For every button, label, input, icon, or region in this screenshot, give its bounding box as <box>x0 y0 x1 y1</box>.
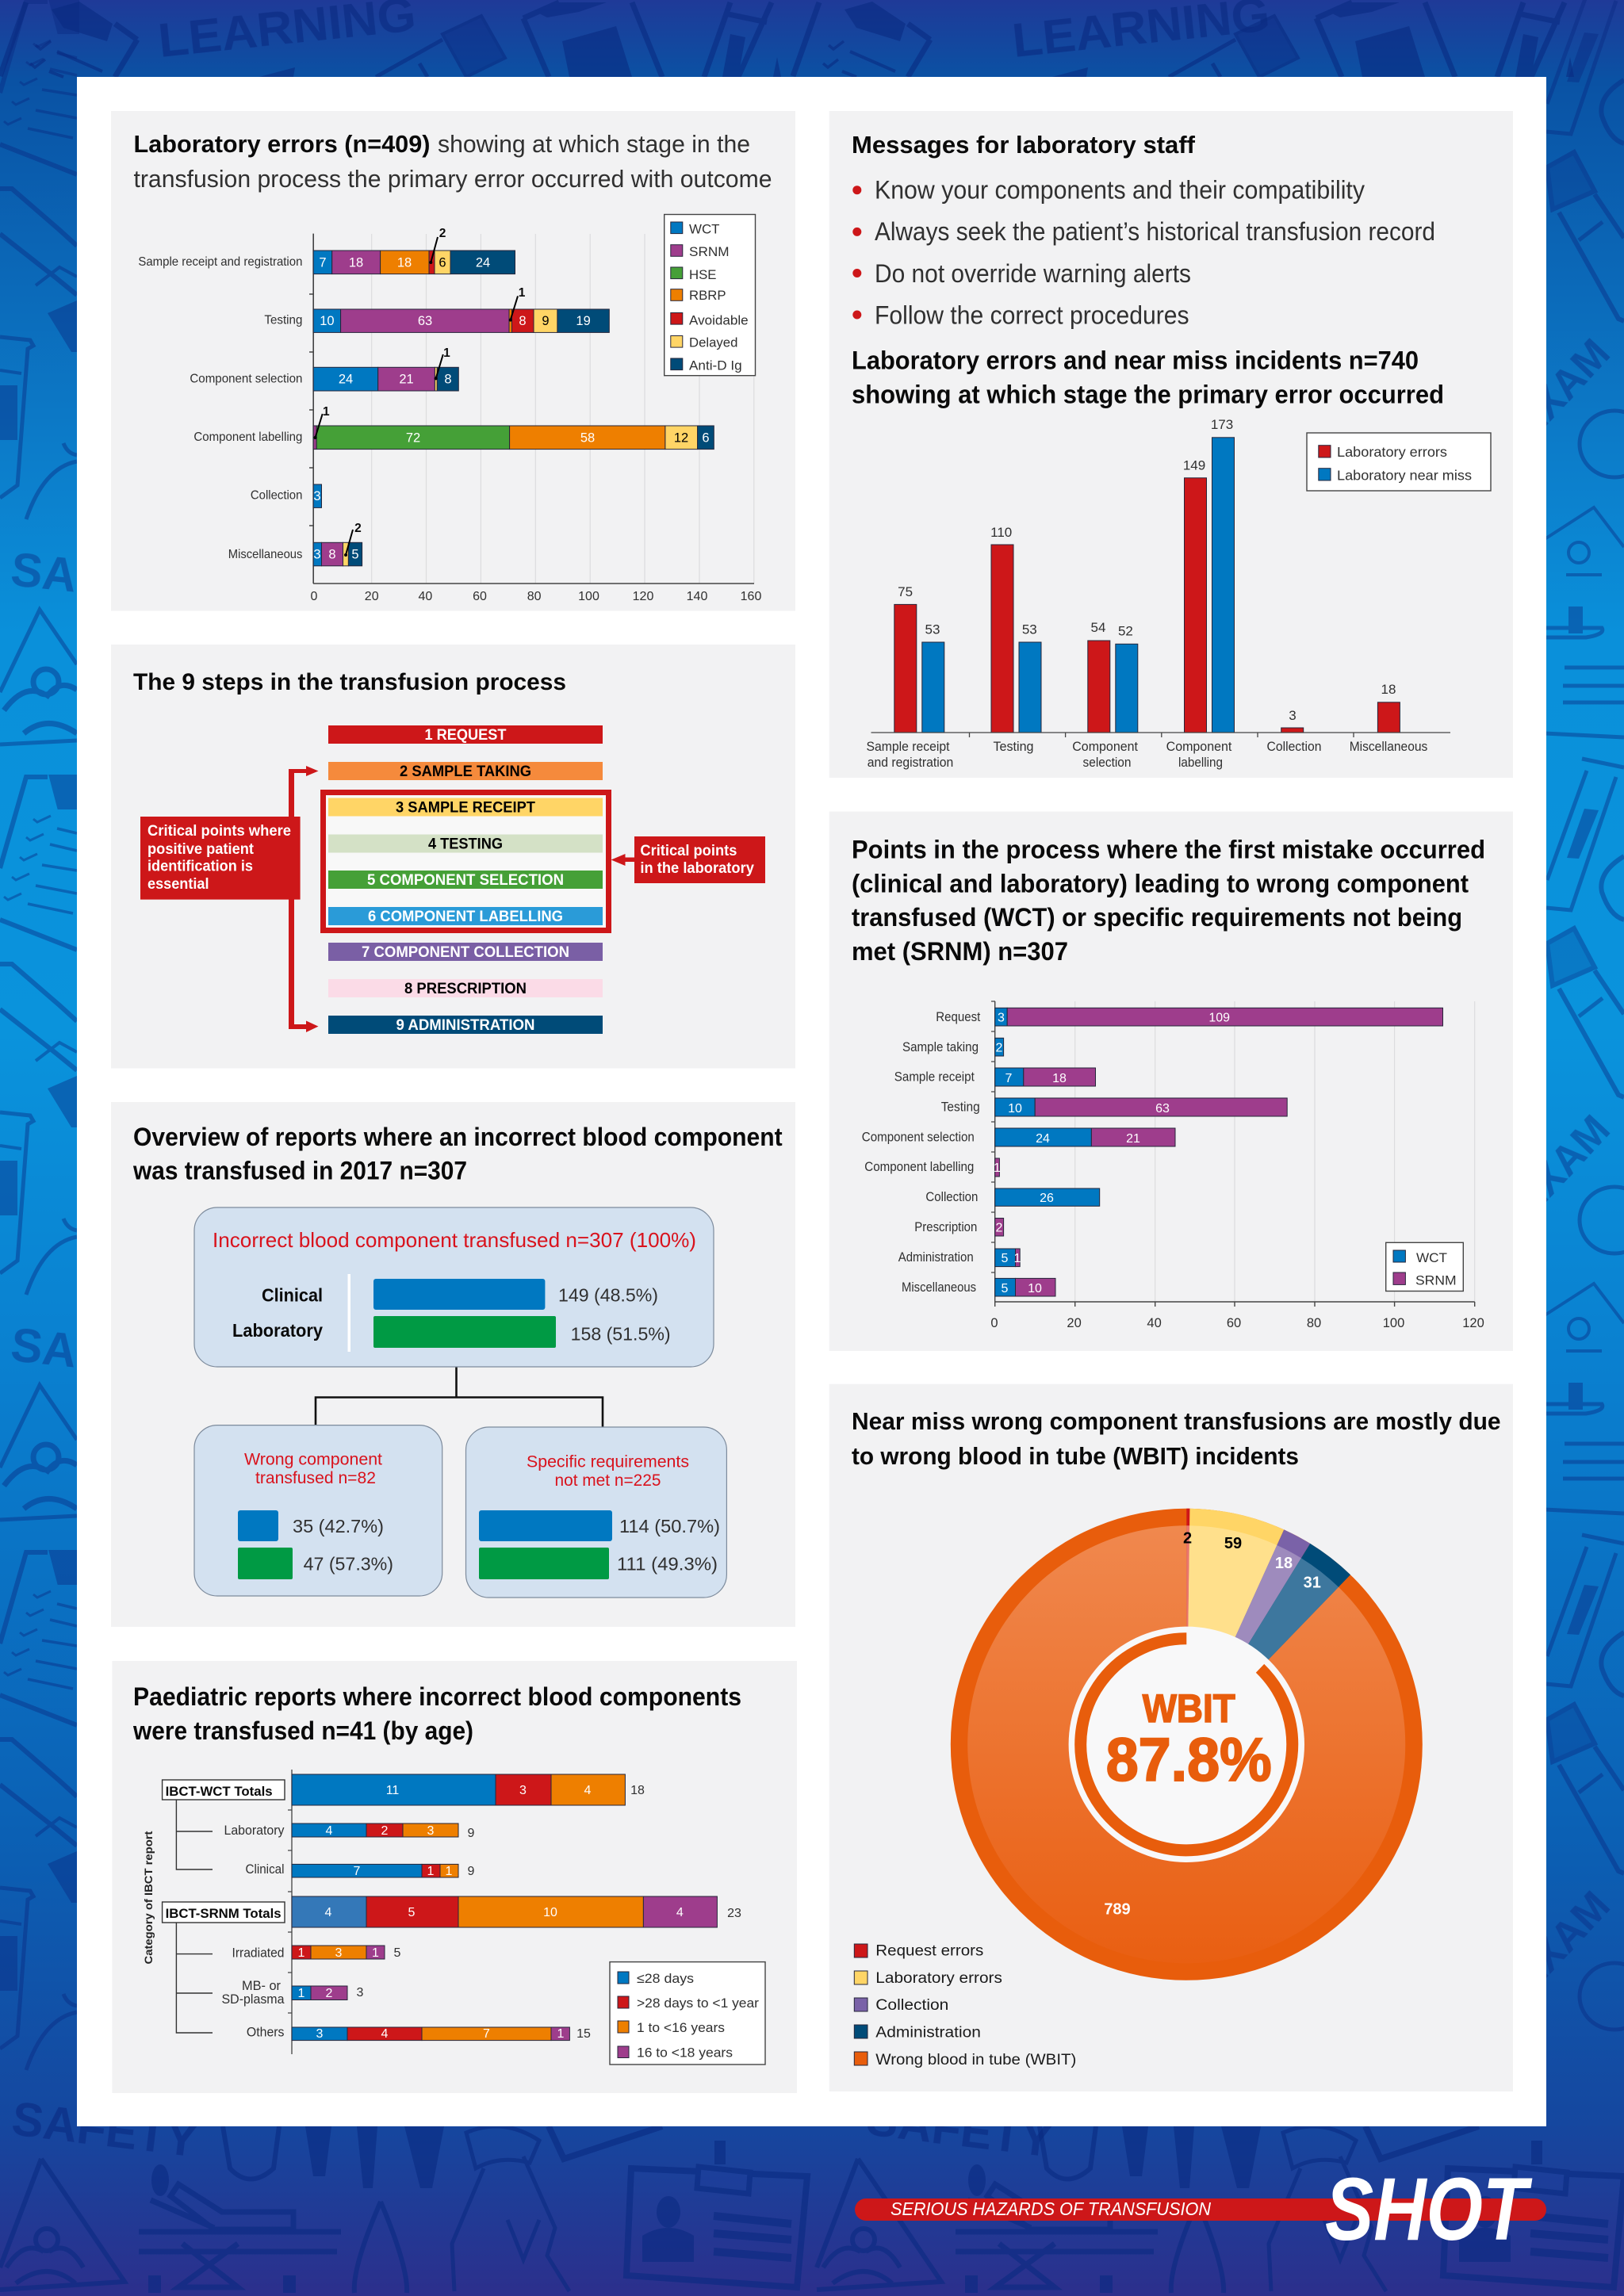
axis tick labels: 0 <box>311 590 318 603</box>
title: overview: was transfused in 2017 n=307 <box>132 1156 467 1184</box>
category labels: Component <box>1072 739 1138 754</box>
background: blue gradient with icon pattern: EXAM <box>1504 1883 1619 2001</box>
title: laboratory errors: showing at which stage in the <box>438 130 750 158</box>
bar value labels: 7 <box>319 255 327 270</box>
bar value labels: 149 <box>1183 457 1205 473</box>
donut chart: 789 <box>1104 1901 1131 1919</box>
bar value labels: 24 <box>339 373 353 387</box>
legend <box>665 214 755 376</box>
leader annotations: 2 <box>439 227 446 240</box>
axis tick labels: 120 <box>1462 1316 1484 1330</box>
bar value labels: 8 <box>328 547 336 561</box>
step bars: 9 ADMINISTRATION <box>396 1017 534 1034</box>
title: laboratory errors <box>133 130 772 193</box>
axis tick labels <box>990 1316 1484 1330</box>
legend: Request errors <box>875 1943 983 1960</box>
box: wrong component transfused <box>194 1425 442 1596</box>
bar value labels: 2 <box>381 1824 389 1838</box>
bullet list: Follow the correct procedures <box>875 301 1189 330</box>
bar value labels: 4 <box>325 1906 332 1919</box>
donut chart <box>951 1509 1423 1980</box>
bar value labels: 53 <box>925 622 940 637</box>
box: wrong component transfused: Wrong component <box>244 1451 382 1468</box>
box: specific requirements not met <box>466 1427 726 1598</box>
category labels: Miscellaneous <box>1350 739 1427 754</box>
row totals: 3 <box>357 1986 364 1999</box>
bar value labels: 3 <box>335 1946 343 1960</box>
bar value labels: 8 <box>444 373 452 387</box>
leader annotations: 1 <box>443 346 450 360</box>
stacked bars <box>313 251 714 566</box>
bar value labels: 10 <box>320 314 335 328</box>
bar value labels: 26 <box>1040 1192 1054 1205</box>
heading: near miss <box>852 346 1444 409</box>
category labels: MB- or <box>242 1979 282 1993</box>
bar value labels: 24 <box>476 255 490 270</box>
row totals: 9 <box>468 1865 475 1878</box>
bar value labels: 53 <box>1022 622 1037 637</box>
category labels: Others <box>247 2026 284 2040</box>
legend: Anti-D Ig <box>689 358 742 373</box>
legend: SRNM <box>689 244 730 259</box>
callout: positive patient identification <box>140 817 301 900</box>
chart grid and axes <box>309 234 754 584</box>
bar value labels: 3 <box>998 1012 1005 1024</box>
bar value labels: 12 <box>674 431 688 446</box>
bar value labels: 63 <box>418 314 432 328</box>
category labels <box>222 1823 285 2040</box>
legend: ≤28 days <box>637 1971 694 1986</box>
bar value labels: 58 <box>580 431 595 446</box>
row labels: Miscellaneous <box>228 548 302 561</box>
bar value labels <box>298 1784 684 2041</box>
top box: incorrect blood component: Incorrect blood component transfused n=307 (100%) <box>213 1228 696 1252</box>
axis tick labels: 0 <box>990 1316 998 1330</box>
axis tick labels: 40 <box>1147 1316 1162 1330</box>
bar value labels: 18 <box>397 255 412 270</box>
row labels: Collection <box>925 1190 978 1204</box>
panel: paediatric reports by age <box>113 1661 797 2093</box>
bar value labels: 63 <box>1155 1102 1170 1115</box>
category labels <box>866 739 1427 770</box>
bar value labels: 2 <box>996 1221 1003 1235</box>
step bars: 4 TESTING <box>428 836 503 853</box>
background: blue gradient with icon pattern: EXAM <box>1504 1107 1619 1225</box>
row totals: 5 <box>394 1946 401 1960</box>
row labels: Testing <box>941 1100 980 1115</box>
footer logo: SHOT Serious Hazards of Transfusion: SHOT <box>1325 2160 1533 2259</box>
bar value labels: 1 <box>994 1161 1001 1175</box>
category labels: Component <box>1166 739 1232 754</box>
bar value labels <box>898 417 1396 723</box>
bar value labels: 18 <box>1381 682 1396 697</box>
stacked bars <box>995 1008 1443 1296</box>
axis tick labels: 40 <box>419 590 432 603</box>
title: laboratory errors: Laboratory errors (n=409) <box>133 130 430 158</box>
row labels: Component selection <box>862 1131 975 1145</box>
bar value labels: 75 <box>898 584 913 599</box>
title: overview: Overview of reports where an incorrect blood component <box>133 1123 783 1151</box>
footer logo: SHOT Serious Hazards of Transfusion: SERIOUS HAZARDS OF TRANSFUSION <box>891 2198 1211 2219</box>
donut chart: 31 <box>1304 1574 1321 1591</box>
legend: 1 to <16 years <box>637 2020 725 2035</box>
top box: incorrect blood component: Clinical <box>262 1284 323 1305</box>
bar value labels: 5 <box>1002 1252 1009 1265</box>
row labels: Administration <box>898 1250 974 1265</box>
step bars: 8 PRESCRIPTION <box>404 981 527 997</box>
legend: SRNM <box>1415 1272 1457 1288</box>
legend: WCT <box>1416 1250 1447 1265</box>
row labels: Sample taking <box>902 1040 979 1054</box>
bar value labels: 7 <box>483 2027 490 2041</box>
category labels: Collection <box>1267 739 1321 754</box>
category labels: Clinical <box>246 1862 284 1877</box>
row totals: 15 <box>576 2027 591 2041</box>
step bars: 2 SAMPLE TAKING <box>400 763 531 780</box>
step bars <box>328 725 603 1034</box>
bar value labels: 3 <box>316 2027 324 2041</box>
panel: overview of incorrect blood component reports <box>111 1102 795 1627</box>
bar value labels: 7 <box>1005 1072 1013 1085</box>
row totals: 23 <box>727 1907 741 1920</box>
category tree lines <box>176 1800 213 2033</box>
bar value labels: 10 <box>1008 1102 1022 1115</box>
heading: 9 steps: The 9 steps in the transfusion process <box>133 669 566 695</box>
row totals: 9 <box>468 1827 475 1840</box>
row labels: Sample receipt <box>894 1070 975 1085</box>
top box: incorrect blood component: 149 (48.5%) <box>558 1284 658 1305</box>
legend: Collection <box>875 1997 948 2014</box>
total box: IBCT-WCT: IBCT-WCT Totals <box>166 1785 273 1799</box>
title: first mistake: (clinical and laboratory) leading to wrong component <box>852 869 1469 897</box>
legend <box>854 1943 1076 2068</box>
legend: Avoidable <box>689 312 749 327</box>
total box: IBCT-WCT <box>163 1780 285 1800</box>
legend: WCT <box>689 222 720 237</box>
axis tick labels: 160 <box>741 590 761 603</box>
bar value labels: 54 <box>1091 620 1105 635</box>
bar value labels: 109 <box>1208 1012 1230 1024</box>
top box: incorrect blood component: 158 (51.5%) <box>571 1324 671 1345</box>
row labels: Component labelling <box>193 430 302 444</box>
bar value labels: 173 <box>1211 417 1233 432</box>
axis tick labels: 100 <box>1383 1316 1404 1330</box>
callout: positive patient identification: essential <box>147 876 209 893</box>
bar value labels: 1 <box>446 1865 453 1878</box>
bar value labels: 10 <box>1028 1282 1042 1295</box>
category labels: Irradiated <box>232 1946 284 1961</box>
title: first mistake <box>852 836 1485 966</box>
arrow: positive identification bracket <box>289 766 319 1032</box>
bar value labels: 4 <box>676 1906 684 1919</box>
donut centre: WBIT 87.8%: 87.8% <box>1106 1726 1272 1794</box>
row totals <box>357 1784 741 2041</box>
legend: Laboratory errors <box>875 1970 1002 1987</box>
heading: near miss: Laboratory errors and near miss incidents n=740 <box>852 346 1419 375</box>
panel: the 9 steps in the transfusion process <box>111 645 795 1069</box>
background: blue gradient with icon pattern: SAFETY <box>9 2091 201 2168</box>
bullet list: Always seek the patient’s historical transfusion record <box>875 217 1435 246</box>
bar value labels: 2 <box>326 1987 333 2000</box>
connector lines <box>316 1367 603 1429</box>
step bars: 3 SAMPLE RECEIPT <box>396 799 535 817</box>
heading: messages for laboratory staff: Messages for laboratory staff <box>852 131 1196 159</box>
bar value labels: 7 <box>354 1865 361 1878</box>
legend: Laboratory near miss <box>1337 468 1472 484</box>
bar value labels: 10 <box>543 1906 557 1919</box>
panel: first mistake points chart <box>829 812 1513 1351</box>
background: blue gradient with icon pattern: SAFETY <box>9 542 199 614</box>
box: wrong component transfused: 47 (57.3%) <box>304 1554 393 1575</box>
box: specific requirements not met: 114 (50.7%) <box>619 1516 720 1536</box>
bar value labels: 3 <box>1289 708 1297 723</box>
axis tick labels: 20 <box>1067 1316 1082 1330</box>
box: wrong component transfused: transfused n=82 <box>255 1469 376 1487</box>
category labels: selection <box>1083 755 1131 770</box>
row labels <box>138 255 302 561</box>
bar value labels: 110 <box>990 525 1012 540</box>
row labels: Component labelling <box>864 1160 974 1174</box>
bar value labels: 21 <box>399 373 414 387</box>
bar value labels: 8 <box>519 314 527 328</box>
background: blue gradient with icon pattern: SAFETY <box>864 2091 1055 2168</box>
legend: Administration <box>875 2024 981 2041</box>
total box: IBCT-SRNM: IBCT-SRNM Totals <box>166 1907 282 1921</box>
bar value labels: 2 <box>996 1042 1003 1054</box>
title: overview <box>132 1123 783 1184</box>
bar value labels <box>313 255 710 561</box>
axis label: category of IBCT report: Category of IBCT report <box>142 1831 155 1965</box>
row labels: Testing <box>264 314 302 327</box>
bar value labels: 4 <box>381 2027 389 2041</box>
bar value labels: 5 <box>351 547 359 561</box>
bar value labels: 1 <box>557 2027 565 2041</box>
row totals: 18 <box>630 1784 645 1797</box>
bar value labels: 9 <box>542 314 550 328</box>
bullet list: Know your components and their compatibility <box>875 176 1365 205</box>
bullet list: Do not override warning alerts <box>875 259 1191 288</box>
bar value labels: 21 <box>1126 1132 1140 1146</box>
legend: Delayed <box>689 335 737 350</box>
bar value labels: 1 <box>298 1987 305 2000</box>
title: laboratory errors: transfusion process the primary error occurred with outcome <box>133 165 772 193</box>
legend <box>1307 433 1491 491</box>
step bars: 6 COMPONENT LABELLING <box>368 909 563 925</box>
box: specific requirements not met: 111 (49.3%) <box>617 1554 718 1575</box>
donut chart: 59 <box>1224 1535 1242 1552</box>
donut chart: 2 <box>1183 1530 1192 1548</box>
bar value labels: 1 <box>372 1946 379 1960</box>
legend: 16 to <18 years <box>637 2045 733 2061</box>
donut chart: 18 <box>1275 1555 1293 1572</box>
box: specific requirements not met: not met n=225 <box>555 1471 661 1490</box>
box: specific requirements not met: Specific requirements <box>527 1452 689 1471</box>
baseline axis <box>871 733 1450 737</box>
legend: RBRP <box>689 288 726 303</box>
bar value labels: 3 <box>313 547 321 561</box>
row labels: Prescription <box>914 1220 977 1234</box>
legend: HSE <box>689 267 717 282</box>
axis tick labels: 120 <box>633 590 653 603</box>
category labels: Sample receipt <box>866 739 950 754</box>
category labels: Laboratory <box>224 1823 285 1838</box>
bar value labels: 6 <box>439 255 446 270</box>
bar value labels: 18 <box>1052 1072 1067 1085</box>
legend: Wrong blood in tube (WBIT) <box>875 2052 1076 2068</box>
callout: positive patient identification: identification is <box>147 859 253 875</box>
step bars: 5 COMPONENT SELECTION <box>367 872 564 889</box>
row labels: Sample receipt and registration <box>138 255 302 269</box>
bar value labels: 3 <box>519 1784 527 1797</box>
bar value labels: 4 <box>584 1784 592 1797</box>
leader annotations: 1 <box>323 405 330 419</box>
category labels: labelling <box>1178 755 1223 770</box>
bar value labels: 52 <box>1118 623 1133 638</box>
top box: incorrect blood component <box>194 1207 714 1367</box>
total box: IBCT-SRNM <box>163 1902 285 1923</box>
legend <box>1386 1242 1463 1291</box>
bar value labels: 5 <box>1002 1282 1009 1295</box>
bar value labels: 19 <box>576 314 591 328</box>
bar value labels <box>994 1012 1230 1295</box>
bar value labels: 1 <box>1014 1252 1021 1265</box>
row labels: Request <box>936 1010 981 1024</box>
bar value labels: 1 <box>298 1946 305 1960</box>
category labels: Testing <box>993 739 1034 754</box>
bullet list <box>852 176 1435 330</box>
row labels: Miscellaneous <box>902 1280 976 1295</box>
title: first mistake: Points in the process where the first mistake occurred <box>852 836 1485 864</box>
axis tick labels: 80 <box>1307 1316 1321 1330</box>
callout: critical points in the laboratory: in the laboratory <box>640 860 754 877</box>
bar value labels: 72 <box>406 431 420 446</box>
callout: critical points in the laboratory <box>634 836 765 883</box>
bar value labels: 24 <box>1036 1132 1050 1146</box>
donut centre: WBIT 87.8%: WBIT <box>1143 1686 1235 1731</box>
callout: critical points in the laboratory: Critical points <box>640 843 737 859</box>
bar value labels: 4 <box>326 1824 333 1838</box>
category labels: and registration <box>868 755 953 770</box>
title: first mistake: met (SRNM) n=307 <box>852 937 1068 966</box>
axis tick labels <box>311 590 761 603</box>
axis tick labels: 20 <box>365 590 379 603</box>
axis tick labels: 60 <box>473 590 487 603</box>
bar value labels: 11 <box>386 1784 399 1797</box>
title: first mistake: transfused (WCT) or specific requirements not being <box>852 903 1462 932</box>
row labels <box>862 1010 981 1295</box>
legend: >28 days to <1 year <box>637 1996 759 2011</box>
heading: near miss: showing at which stage the primary error occurred <box>852 381 1444 409</box>
bar value labels: 6 <box>702 431 710 446</box>
bar value labels: 3 <box>427 1824 435 1838</box>
grouped bar chart bars <box>894 438 1400 733</box>
background: blue gradient with icon pattern: EXAM <box>1504 331 1619 449</box>
title: paediatric: Paediatric reports where incorrect blood components <box>133 1682 741 1711</box>
axis tick labels: 80 <box>527 590 542 603</box>
laboratory highlight box <box>324 793 609 931</box>
bar value labels: 5 <box>408 1906 416 1919</box>
callout: positive patient identification: positive patient <box>147 841 255 858</box>
axis tick labels: 60 <box>1227 1316 1241 1330</box>
bar value labels: 18 <box>349 255 363 270</box>
title: paediatric <box>132 1682 741 1745</box>
legend: Laboratory errors <box>1337 444 1447 460</box>
leader annotations: 1 <box>519 286 526 300</box>
bar value labels: 3 <box>313 489 321 503</box>
axis <box>288 1770 292 2054</box>
panel: laboratory errors stacked bar chart <box>111 111 795 610</box>
panel: near miss WBIT donut chart <box>829 1384 1513 2091</box>
callout: positive patient identification: Critical points where <box>147 823 291 840</box>
row labels: Component selection <box>190 372 302 385</box>
background: blue gradient with icon pattern: SAFETY <box>9 1318 199 1390</box>
title: near miss WBIT: to wrong blood in tube (WBIT) incidents <box>852 1442 1299 1470</box>
title: near miss WBIT <box>852 1407 1501 1470</box>
legend <box>610 1962 765 2064</box>
bar value labels: 1 <box>427 1865 435 1878</box>
step bars: 1 REQUEST <box>425 727 507 744</box>
title: near miss WBIT: Near miss wrong component transfusions are mostly due <box>852 1407 1501 1435</box>
leader annotations: 2 <box>354 522 362 535</box>
donut centre: WBIT 87.8% <box>1106 1686 1272 1794</box>
row labels: Collection <box>251 489 302 503</box>
axis tick labels: 100 <box>578 590 599 603</box>
stacked bars <box>292 1774 717 2041</box>
leader annotations <box>314 227 526 557</box>
grid and axes <box>991 1001 1475 1307</box>
box: wrong component transfused: 35 (42.7%) <box>293 1516 384 1536</box>
arrow: to laboratory box <box>611 854 634 866</box>
step bars: 7 COMPONENT COLLECTION <box>362 944 569 961</box>
panel: messages and near miss chart <box>829 111 1513 778</box>
category labels: SD-plasma <box>222 1992 285 2007</box>
footer logo: SHOT Serious Hazards of Transfusion <box>855 2160 1546 2259</box>
top box: incorrect blood component: Laboratory <box>232 1320 323 1341</box>
title: paediatric: were transfused n=41 (by age) <box>132 1716 473 1745</box>
axis tick labels: 140 <box>687 590 707 603</box>
